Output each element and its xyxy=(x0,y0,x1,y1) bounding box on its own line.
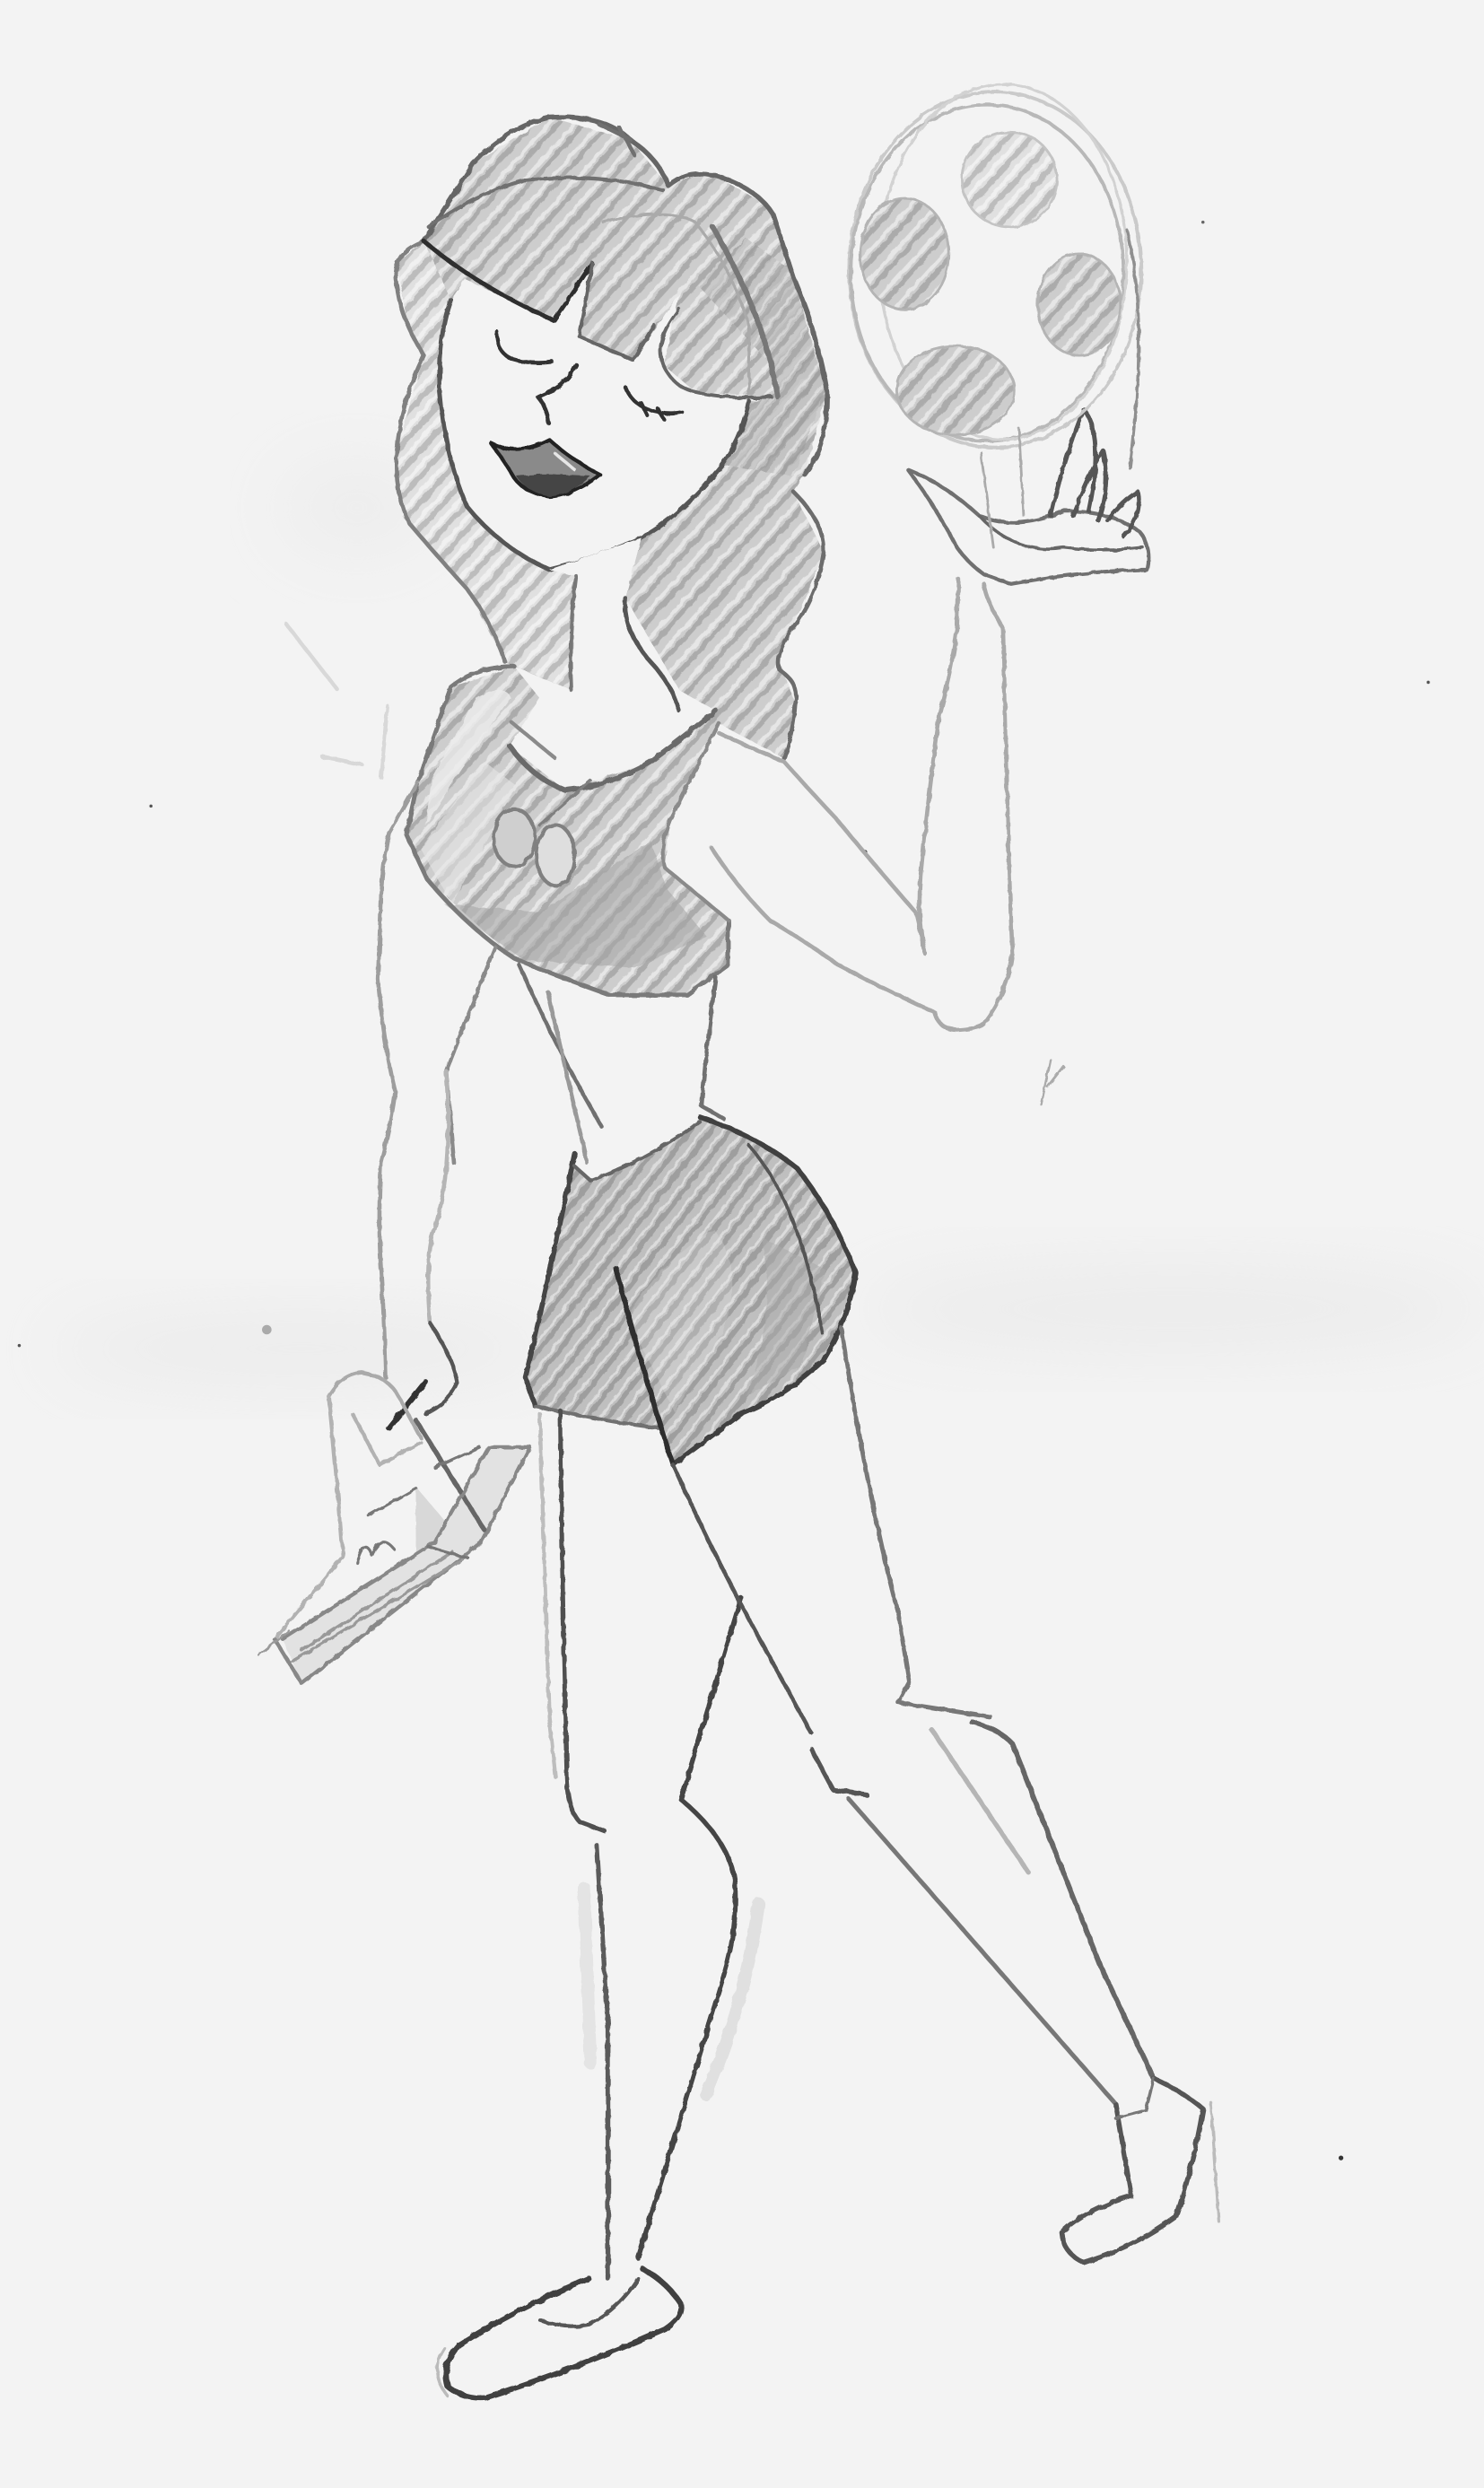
left arm holding shoe xyxy=(378,782,458,1428)
carried shoe xyxy=(258,1373,530,1683)
front foot shoe xyxy=(437,2269,681,2397)
back leg xyxy=(673,1328,1154,2104)
hair xyxy=(396,117,827,758)
lips xyxy=(491,440,600,497)
raised hand xyxy=(908,409,1148,584)
face xyxy=(423,241,772,570)
closed eyes and nose xyxy=(497,332,683,423)
stray pencil marks xyxy=(286,624,1063,1104)
shorts xyxy=(526,1117,855,1464)
ball xyxy=(849,84,1141,547)
front leg xyxy=(540,1410,759,2279)
midriff xyxy=(446,947,724,1163)
raised arm xyxy=(711,580,1013,1030)
neck xyxy=(510,538,716,790)
crop top xyxy=(406,667,729,995)
back foot xyxy=(1061,2079,1218,2263)
